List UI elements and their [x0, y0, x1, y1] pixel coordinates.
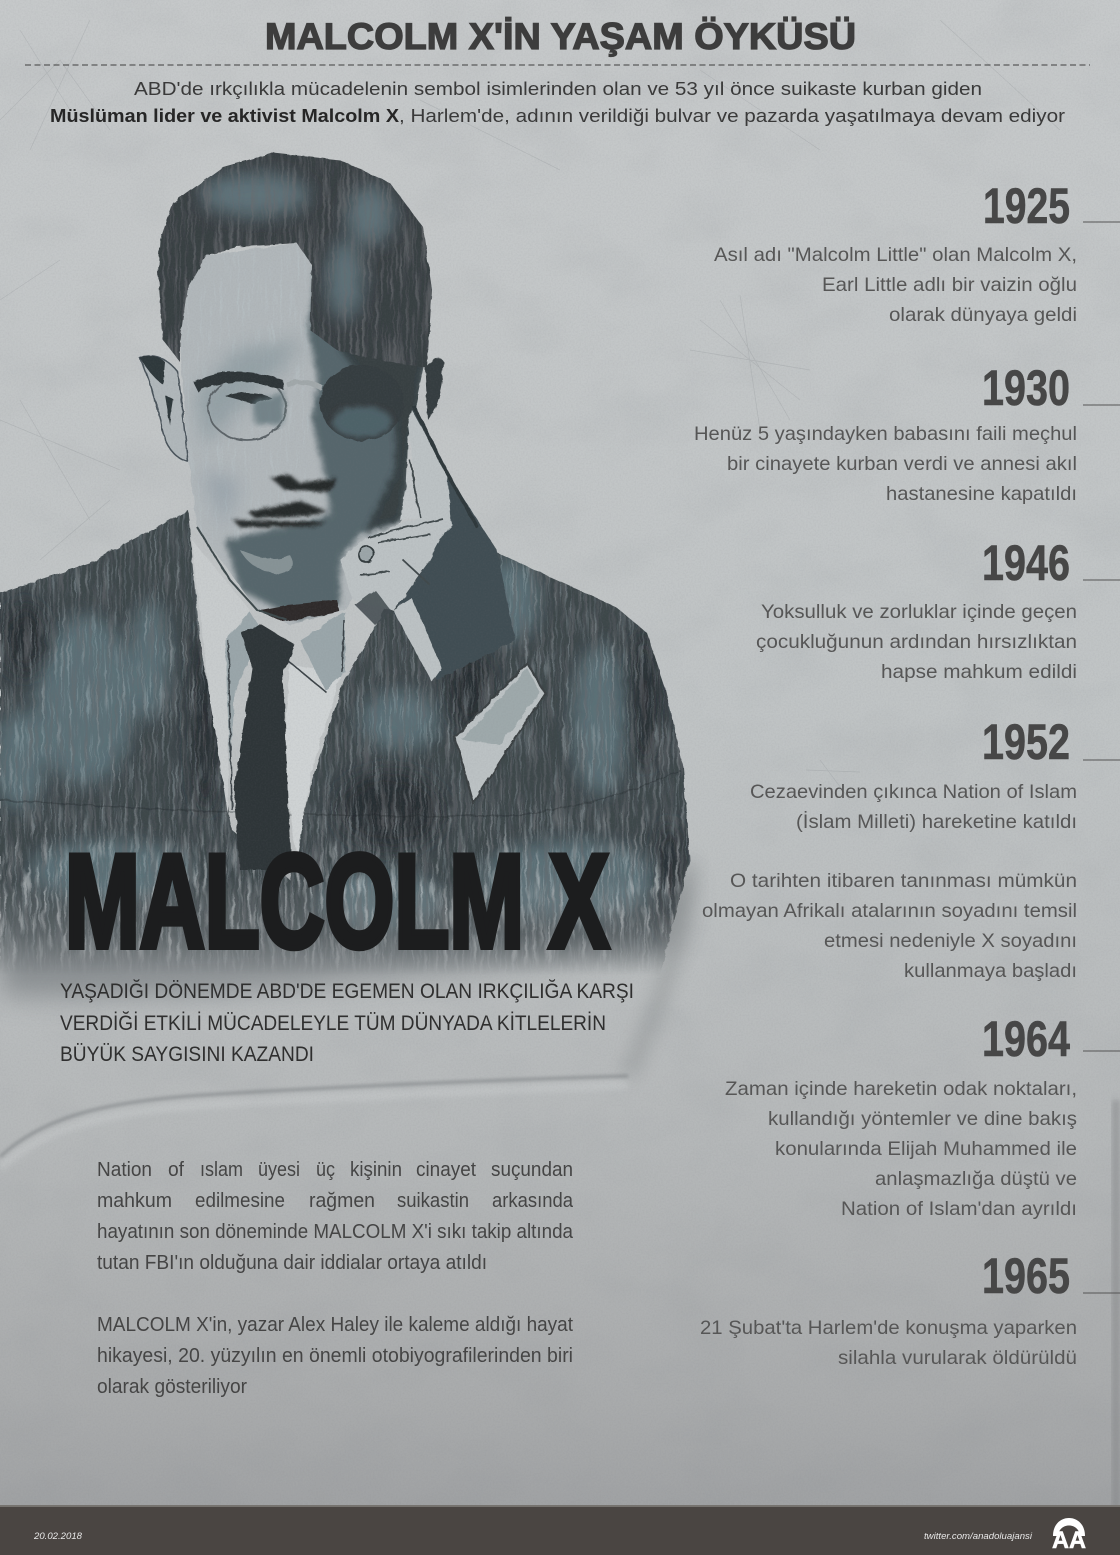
text block: autobiography: olarak gösteriliyor	[97, 1376, 247, 1398]
text block: FBI claims: üç	[316, 1159, 335, 1181]
text block: autobiography: MALCOLM X'in, yazar Alex Haley ile kaleme aldığı hayat	[97, 1314, 573, 1336]
portrait glasses	[193, 365, 404, 441]
text block: FBI claims: kişinin	[350, 1159, 402, 1181]
timeline: 1925: Asıl adı "Malcolm Little" olan Malcolm X,	[714, 244, 1077, 266]
timeline: 1964: anlaşmazlığa düştü ve	[875, 1168, 1077, 1190]
caption	[60, 980, 634, 1066]
text block: autobiography: hikayesi, 20. yüzyılın en önemli otobiyografilerinden biri	[97, 1345, 573, 1367]
timeline: 1952: etmesi nedeniyle X soyadını	[824, 930, 1077, 952]
timeline: 1925: olarak dünyaya geldi	[889, 304, 1077, 326]
intro text: Müslüman lider ve aktivist Malcolm X	[50, 105, 400, 126]
portrait face	[180, 242, 424, 626]
timeline: 1930: bir cinayete kurban verdi ve annesi akıl	[727, 453, 1077, 475]
text block: autobiography	[97, 1314, 573, 1398]
text block: FBI claims	[97, 1159, 574, 1274]
timeline: 1930	[694, 360, 1120, 505]
portrait: Malcolm X sketch	[0, 145, 700, 980]
timeline: 1964: kullandığı yöntemler ve dine bakış	[768, 1108, 1077, 1130]
timeline: 1952: olmayan Afrikalı atalarının soyadını temsil	[702, 900, 1077, 922]
timeline: 1946: çocukluğunun ardından hırsızlıktan	[756, 631, 1077, 653]
footer twitter: twitter.com/anadoluajansi	[924, 1531, 1033, 1541]
timeline: 1925: 1925	[983, 178, 1070, 234]
text block: FBI claims: hayatının son döneminde MALCOLM X'i sıkı takip altında	[97, 1221, 574, 1243]
text block: FBI claims: mahkum	[97, 1190, 172, 1212]
portrait ears	[140, 356, 444, 462]
timeline: 1946	[756, 535, 1120, 683]
timeline: 1964	[725, 1011, 1120, 1220]
title: MALCOLM X'İN YAŞAM ÖYKÜSÜ	[265, 16, 856, 57]
timeline: 1946: 1946	[982, 535, 1070, 591]
portrait jacket	[0, 480, 700, 980]
text block: FBI claims: arkasında	[492, 1190, 574, 1212]
timeline: 1952: (İslam Milleti) hareketine katıldı	[796, 810, 1077, 833]
timeline: 1965: 1965	[982, 1248, 1070, 1304]
intro text: ABD'de ırkçılıkla mücadelenin sembol isimlerinden olan ve 53 yıl önce suikaste kurban giden	[134, 78, 982, 99]
timeline: 1952: Cezaevinden çıkınca Nation of Islam	[750, 781, 1077, 803]
timeline: 1952: 1952	[982, 714, 1070, 770]
text block: FBI claims: suikastin	[397, 1190, 469, 1212]
timeline: 1965: 21 Şubat'ta Harlem'de konuşma yaparken	[700, 1317, 1077, 1339]
timeline: 1964: 1964	[982, 1011, 1070, 1067]
footer date: 20.02.2018	[33, 1531, 82, 1541]
text block: FBI claims: of	[168, 1159, 184, 1181]
portrait hand	[340, 405, 515, 682]
timeline: 1930: 1930	[982, 360, 1070, 416]
text block: FBI claims: cinayet	[416, 1159, 476, 1181]
intro text	[50, 78, 1065, 126]
portrait shirt	[192, 540, 345, 860]
text block: FBI claims: edilmesine	[195, 1190, 285, 1212]
portrait tie	[234, 625, 295, 870]
text block: FBI claims: ıslam	[200, 1159, 243, 1181]
timeline: 1930: Henüz 5 yaşındayken babasını faili meçhul	[694, 423, 1077, 445]
timeline: 1965	[700, 1248, 1120, 1369]
timeline: 1925: Earl Little adlı bir vaizin oğlu	[822, 274, 1077, 296]
timeline: 1952: O tarihten itibaren tanınması mümkün	[730, 870, 1077, 892]
timeline: 1964: Nation of Islam'dan ayrıldı	[841, 1198, 1077, 1220]
text block: FBI claims: Nation	[97, 1159, 152, 1181]
timeline: 1964: konularında Elijah Muhammed ile	[775, 1138, 1077, 1160]
torn paper sheet edge	[0, 860, 690, 1168]
timeline: 1946: Yoksulluk ve zorluklar içinde geçen	[761, 601, 1077, 623]
caption: VERDİĞİ ETKİLİ MÜCADELEYLE TÜM DÜNYADA KİTLELERİN	[60, 1012, 606, 1035]
timeline: 1964: Zaman içinde hareketin odak noktaları,	[725, 1078, 1077, 1100]
text block: FBI claims: rağmen	[309, 1190, 375, 1212]
timeline: 1952	[702, 714, 1120, 982]
timeline: 1925	[714, 178, 1120, 326]
timeline: 1946: hapse mahkum edildi	[881, 661, 1077, 683]
timeline: 1930: hastanesine kapatıldı	[886, 483, 1077, 505]
timeline: 1952: kullanmaya başladı	[904, 960, 1077, 982]
icon: Anadolu Agency logo: AA	[1052, 1527, 1086, 1554]
timeline: 1965: silahla vurularak öldürüldü	[838, 1347, 1077, 1369]
footer bar	[0, 1505, 1120, 1555]
text block: FBI claims: suçundan	[491, 1159, 573, 1181]
caption: BÜYÜK SAYGISINI KAZANDI	[60, 1043, 314, 1066]
text block: FBI claims: üyesi	[258, 1159, 300, 1181]
caption: YAŞADIĞI DÖNEMDE ABD'DE EGEMEN OLAN IRKÇILIĞA KARŞI	[60, 980, 634, 1003]
smudge behind name	[0, 880, 690, 996]
portrait pocket square	[455, 663, 545, 803]
intro text: , Harlem'de, adının verildiği bulvar ve pazarda yaşatılmaya devam ediyor	[399, 105, 1065, 126]
text block: FBI claims: tutan FBI'ın olduğuna dair iddialar ortaya atıldı	[97, 1252, 487, 1274]
portrait hair	[157, 152, 432, 368]
heading: MALCOLM X: MALCOLM X	[65, 828, 609, 976]
